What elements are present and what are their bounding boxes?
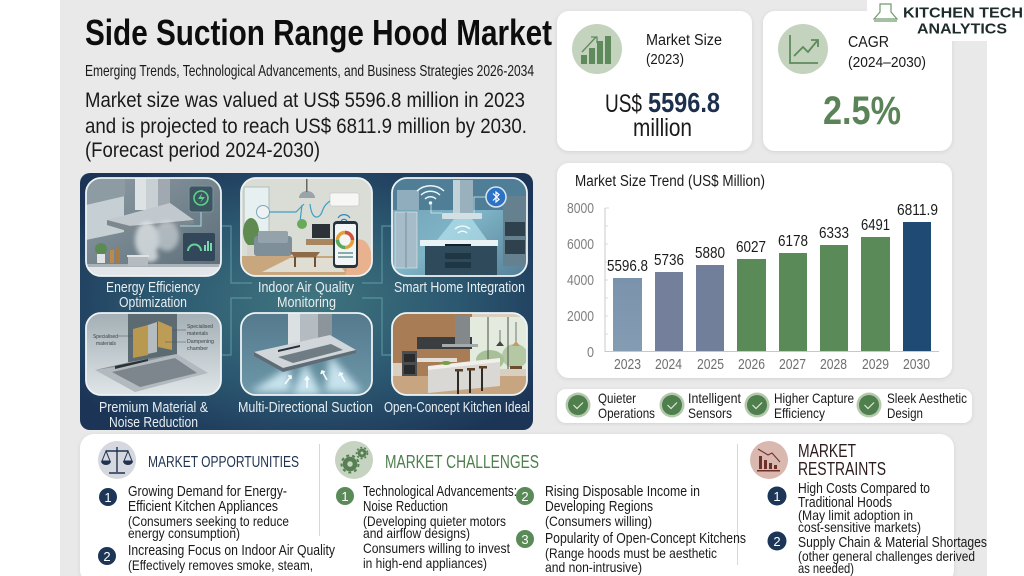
year labels: 2027 [779, 357, 806, 373]
item 1: 1 [773, 489, 781, 504]
heading: MARKET CHALLENGES [385, 452, 539, 472]
value labels: 6027 [736, 239, 766, 256]
feature label: smart home: Smart Home Integration [394, 279, 525, 296]
brand name: ANALYTICS [917, 20, 1007, 38]
market size value: million [633, 114, 692, 142]
item 1: 1 [104, 490, 112, 505]
CAGR value: 2.5% [823, 89, 901, 133]
section: market challenges [335, 441, 746, 575]
image: energy efficiency hood [86, 178, 221, 276]
benefit: quieter operations: Quieter [598, 390, 636, 406]
item 1: in high-end appliances) [363, 555, 487, 571]
image: open-concept kitchen [392, 313, 528, 395]
section: market restraints [750, 441, 987, 576]
benefit: sleek design: Sleek Aesthetic [887, 390, 967, 406]
item 1: 1 [341, 489, 349, 504]
value labels: 5880 [695, 245, 725, 262]
heading [798, 441, 886, 479]
item 3: 3 [521, 532, 529, 547]
y axis: 0 [587, 344, 594, 361]
panel: benefit checklist [557, 389, 972, 423]
CAGR label [848, 34, 926, 71]
item 2: (other general challenges derived [798, 548, 975, 564]
value labels: 6178 [778, 233, 808, 250]
value labels: 5736 [654, 252, 684, 269]
image: noise reduction materials: Specialised [93, 334, 118, 340]
brand name [903, 4, 1023, 38]
item 2 [768, 532, 987, 576]
benefit: capture efficiency: Efficiency [774, 405, 825, 421]
benefit: capture efficiency [744, 390, 854, 421]
panel: market size trend chart [557, 163, 952, 378]
image: multi-directional suction [241, 313, 372, 395]
item 2: Increasing Focus on Indoor Air Quality [128, 543, 336, 559]
feature label: energy efficiency [106, 279, 200, 311]
item 1: (Developing quieter motors [363, 513, 506, 529]
feature label: energy efficiency: Energy Efficiency [106, 279, 200, 296]
item 2 [98, 543, 336, 573]
item 1: High Costs Compared to [798, 481, 930, 497]
item 2: (Consumers willing) [545, 513, 652, 529]
feature label: premium material: Premium Material & [99, 399, 208, 416]
heading: RESTRAINTS [798, 459, 886, 479]
benefit: quieter operations: Operations [598, 405, 655, 421]
CAGR label: CAGR [848, 34, 889, 51]
market size value [605, 87, 720, 142]
benefit: intelligent sensors [660, 390, 741, 421]
y axis: 8000 [567, 200, 594, 217]
item 2: (Effectively removes smoke, steam, [128, 557, 313, 573]
icon: range hood [874, 4, 897, 21]
feature label: suction: Multi-Directional Suction [238, 399, 373, 416]
brand name: KITCHEN TECH [903, 4, 1023, 22]
item 1: Technological Advancements: [363, 484, 517, 500]
y axis: 6000 [567, 236, 594, 253]
item 1: Traditional Hoods [798, 495, 892, 511]
value labels: 6333 [819, 225, 849, 242]
feature label: air quality: Monitoring [277, 294, 336, 311]
feature label: air quality [258, 279, 354, 311]
year labels: 2028 [820, 357, 847, 373]
item 1: energy consumption) [128, 525, 240, 541]
item 1: Noise Reduction [363, 499, 448, 515]
image: noise reduction materials: Dampening [187, 339, 214, 345]
year labels: 2024 [655, 357, 682, 373]
intro text block: (Forecast period 2024-2030) [85, 139, 320, 162]
item 3: (Range hoods must be aesthetic [545, 545, 717, 561]
item 1 [99, 484, 289, 541]
intro text block: and is projected to reach US$ 6811.9 million by 2030. [85, 115, 527, 138]
benefit: intelligent sensors: Intelligent [688, 390, 741, 406]
year labels: 2030 [903, 357, 930, 373]
image: noise reduction materials: chamber [187, 346, 208, 352]
section: market opportunities [98, 441, 336, 573]
title: Side Suction Range Hood Market [85, 12, 552, 53]
panel: market analysis [80, 434, 987, 576]
subtitle: Emerging Trends, Technological Advancements, and Business Strategies 2026-2034 [85, 63, 534, 80]
item 2: Rising Disposable Income in [545, 484, 700, 500]
CAGR label: (2024–2030) [848, 54, 926, 71]
value labels: 6491 [861, 217, 890, 234]
heading: MARKET OPPORTUNITIES [148, 454, 299, 471]
benefit: intelligent sensors: Sensors [688, 405, 732, 421]
benefit: sleek design [856, 390, 967, 421]
image: noise reduction materials: materials [187, 331, 209, 337]
item 2: Developing Regions [545, 499, 653, 515]
item 2: 2 [521, 489, 529, 504]
y axis: 4000 [567, 272, 594, 289]
image: indoor air quality room [241, 178, 372, 276]
panel: technology features [80, 173, 533, 431]
item 3 [516, 530, 746, 575]
feature label: air quality: Indoor Air Quality [258, 279, 354, 296]
benefit: quieter operations [566, 390, 655, 421]
item 1: cost-sensitive markets) [798, 519, 921, 535]
value labels: 6811.9 [897, 202, 938, 219]
item 3: and non-intrusive) [545, 559, 642, 575]
card: market size [557, 11, 752, 151]
item 2 [516, 484, 700, 529]
item 1: and airflow designs) [363, 525, 470, 541]
heading: MARKET [798, 441, 856, 461]
benefit: sleek design: Design [887, 405, 923, 421]
year labels: 2026 [738, 357, 765, 373]
image: noise reduction materials: materials [96, 341, 116, 347]
benefit: capture efficiency: Higher Capture [774, 390, 854, 406]
logo [867, 0, 1024, 41]
image: noise reduction materials: Specialised [187, 324, 213, 330]
item 1: (Consumers seeking to reduce [128, 513, 289, 529]
intro text block [85, 89, 527, 162]
icon: trend line [778, 24, 828, 74]
market size label: (2023) [646, 51, 684, 68]
year labels: 2023 [614, 357, 641, 373]
feature label: premium material [99, 399, 208, 431]
chart title: Market Size Trend (US$ Million) [575, 173, 765, 190]
bars [613, 222, 931, 351]
y axis [567, 200, 939, 361]
icon: gears [335, 441, 373, 479]
intro text block: Market size was valued at US$ 5596.8 million in 2023 [85, 89, 525, 112]
year labels [614, 357, 930, 373]
item 1: (May limit adoption in [798, 507, 913, 523]
item 1 [768, 481, 930, 535]
year labels: 2029 [862, 357, 889, 373]
market size value: US$ [605, 90, 642, 118]
feature label: premium material: Noise Reduction [109, 414, 198, 431]
image: noise reduction materials [86, 313, 221, 395]
card: CAGR [763, 11, 952, 151]
item 1: Efficient Kitchen Appliances [128, 499, 278, 515]
year labels: 2025 [697, 357, 724, 373]
item 2: Supply Chain & Material Shortages [798, 535, 987, 551]
item 1: Consumers willing to invest [363, 540, 510, 556]
image: smart home kitchen [392, 178, 527, 276]
feature label: open concept: Open-Concept Kitchen Ideal [384, 399, 530, 416]
market size label [646, 32, 722, 68]
item 2: 2 [773, 534, 781, 549]
item 1: Growing Demand for Energy- [128, 484, 287, 500]
market size value: 5596.8 [648, 87, 720, 118]
item 2: as needed) [798, 560, 854, 576]
icon: rising bars [572, 24, 622, 74]
value labels [607, 202, 938, 275]
icon: scales [98, 441, 136, 479]
value labels: 5596.8 [607, 258, 648, 275]
item 3: Popularity of Open-Concept Kitchens [545, 531, 746, 547]
feature label: energy efficiency: Optimization [119, 294, 187, 311]
market size label: Market Size [646, 32, 722, 49]
icon: falling bars [750, 441, 788, 479]
item 2: 2 [103, 549, 111, 564]
item 1 [336, 484, 517, 571]
y axis: 2000 [567, 308, 594, 325]
